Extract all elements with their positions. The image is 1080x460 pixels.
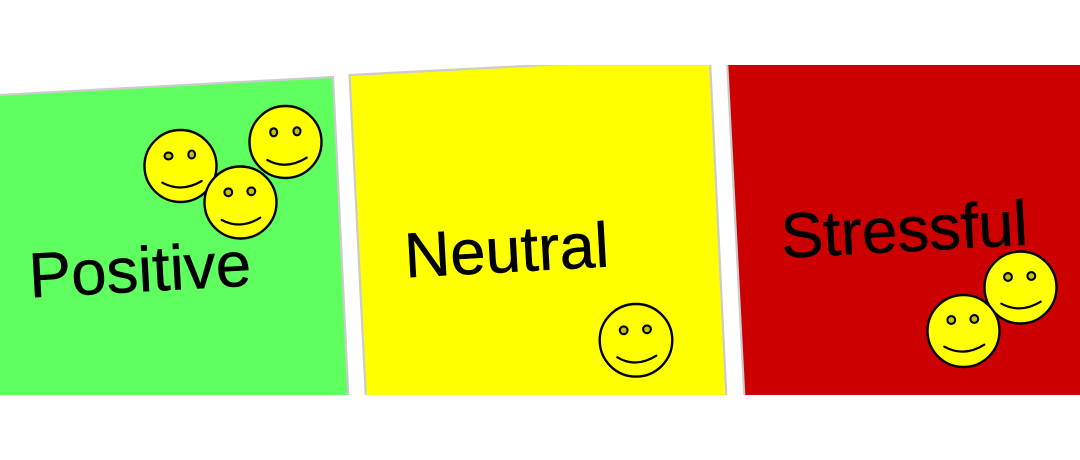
icon: smiley 5 xyxy=(984,252,1056,324)
panel: stressful xyxy=(726,65,1080,395)
positive card xyxy=(0,77,350,420)
icon: smiley 6 xyxy=(928,295,1000,367)
neutral card xyxy=(350,60,728,420)
neutral label: Neutral xyxy=(402,211,611,291)
stressful card xyxy=(726,65,1080,395)
icon: smiley 1 xyxy=(144,130,216,202)
positive label: Positive xyxy=(27,230,253,311)
panel: positive xyxy=(0,77,350,420)
icon: smiley 2 xyxy=(204,166,276,238)
icon: smiley 3 xyxy=(250,106,322,178)
icon: smiley 4 xyxy=(600,304,672,377)
stressful label: Stressful xyxy=(779,189,1029,272)
panel: neutral xyxy=(350,60,728,420)
